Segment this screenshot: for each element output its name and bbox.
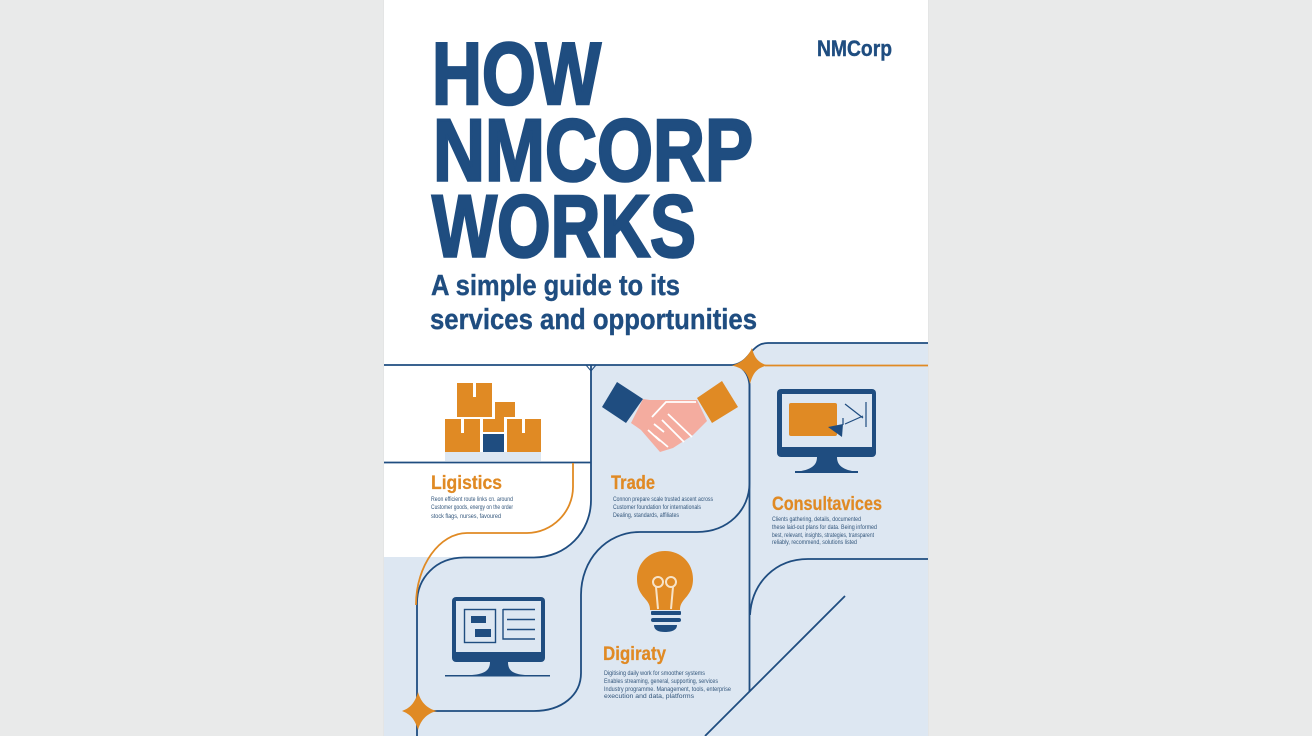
title: NMCORP [433, 100, 753, 200]
label: trade: Trade [611, 473, 655, 494]
icon: digital monitor [445, 597, 550, 676]
subtitle: A simple guide to its [431, 270, 680, 302]
text: trade description [613, 496, 713, 519]
star accent bottom [402, 692, 437, 730]
text: logistics description: stock flags, nurses, favoured [431, 513, 501, 520]
text: digital description: Industry programme. Management, tools, enterprise [604, 686, 731, 693]
text: consulting description: Clients gathering, details, documented [772, 516, 861, 523]
brand name: NMCorp [817, 36, 892, 61]
text: logistics description: Reon efficient route links cn. around [431, 496, 513, 503]
text: digital description: Digitising daily work for smoother systems [604, 670, 705, 677]
label: logistics: Ligistics [431, 473, 502, 494]
star accent top [732, 348, 768, 384]
poster background [383, 0, 929, 736]
text: consulting description [772, 516, 877, 546]
text: logistics description: Customer goods, energy on the order [431, 504, 514, 511]
text: trade description: Connon prepare scale trusted ascent across [613, 496, 713, 503]
label: digital: Digiraty [603, 644, 666, 665]
text: consulting description: reliably, recommend, solutions listed [772, 539, 857, 546]
icon: light bulb [637, 551, 693, 632]
text: trade description: Customer foundation for internationals [613, 504, 701, 511]
orange connector lines [416, 366, 928, 605]
subtitle: services and opportunities [430, 304, 757, 336]
title [432, 24, 753, 276]
text: digital description: Enables streaming, general, supporting, services [604, 678, 718, 685]
text: digital description [604, 670, 731, 700]
label: consulting: Consultavices [772, 493, 882, 515]
title: HOW [432, 24, 601, 123]
subtitle [430, 270, 757, 336]
icon: handshake [602, 381, 738, 452]
title: WORKS [432, 176, 696, 276]
connector lines [384, 343, 928, 736]
icon: consulting monitor [777, 389, 876, 473]
icon: boxes [445, 383, 541, 461]
text: consulting description: these laid-out plans for data. Being informed [772, 524, 877, 531]
text: digital description: execution and data, platforms [604, 693, 694, 700]
text: logistics description [431, 496, 514, 520]
text: consulting description: best, relevant, insights, strategies, transparent [772, 532, 874, 539]
text: trade description: Dealing, standards, affiliates [613, 512, 679, 519]
